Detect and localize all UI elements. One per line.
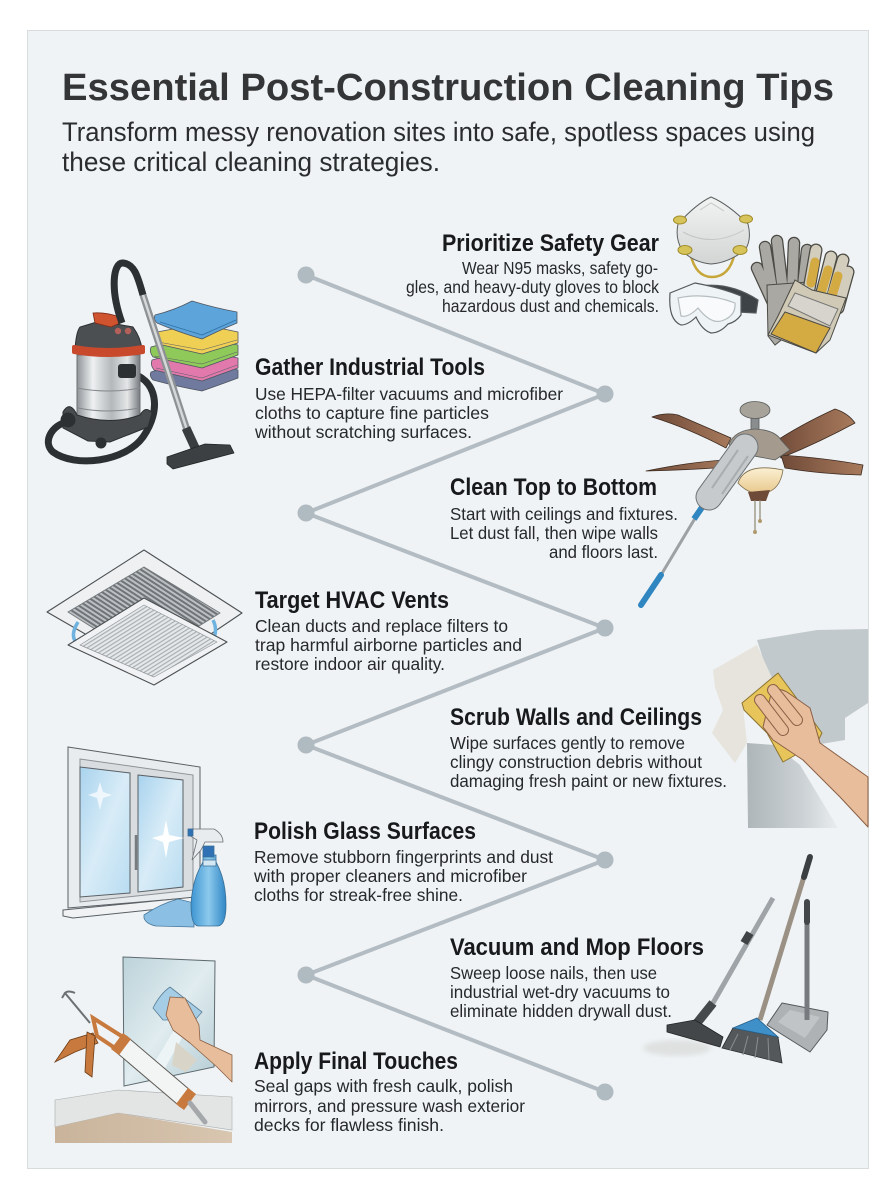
icon: fan blades xyxy=(646,409,863,475)
front glove xyxy=(808,250,848,308)
text block: Clean Top to Bottom xyxy=(450,474,678,562)
text block: Vacuum and Mop Floors: Sweep loose nails, then use xyxy=(450,963,657,983)
text block: Vacuum and Mop Floors: industrial wet-dry vacuums to xyxy=(450,982,670,1002)
text block: Gather Industrial Tools: without scratching surfaces. xyxy=(254,422,472,442)
text block: Target HVAC Vents xyxy=(255,587,522,674)
icon: baseboard and wood floor xyxy=(55,1090,232,1143)
icon: ceiling fan and duster xyxy=(641,402,863,605)
icon: duster with telescopic handle xyxy=(641,447,748,605)
text block: Gather Industrial Tools xyxy=(254,354,563,442)
icon: vacuum wand with floor head xyxy=(667,898,773,1047)
text block: Gather Industrial Tools: Use HEPA-filter vacuums and microfiber xyxy=(255,384,563,404)
icon: HVAC vent and filter xyxy=(47,550,242,685)
icon: sparkles on glass xyxy=(88,782,184,858)
icon: fan light bowl xyxy=(738,468,783,534)
icon: safety goggles xyxy=(670,283,758,333)
text block: Scrub Walls and Ceilings xyxy=(450,704,727,791)
text block: Gather Industrial Tools: cloths to capture fine particles xyxy=(255,403,489,423)
text block: Vacuum and Mop Floors: Vacuum and Mop Floors xyxy=(450,934,704,961)
icon: dustpan xyxy=(767,902,828,1052)
zigzag connector timeline xyxy=(298,266,614,1100)
icon: cloth and wiping hand xyxy=(153,987,232,1082)
text block: Target HVAC Vents: trap harmful airborne particles and xyxy=(255,635,522,655)
icon: caulk gun xyxy=(55,992,205,1122)
text block: Target HVAC Vents: Target HVAC Vents xyxy=(255,587,449,614)
icon: airflow arrows xyxy=(73,620,216,642)
text block: Scrub Walls and Ceilings: damaging fresh paint or new fixtures. xyxy=(450,771,727,791)
text block: Polish Glass Surfaces: Polish Glass Surfaces xyxy=(254,818,476,845)
text block: Clean Top to Bottom: Start with ceilings and fixtures. xyxy=(450,504,678,524)
text block: Scrub Walls and Ceilings: Wipe surfaces gently to remove xyxy=(450,733,685,753)
icon: vacuum wand and floor head xyxy=(114,263,143,323)
icon: shop vacuum and microfiber cloth stack xyxy=(48,263,238,469)
text block: Target HVAC Vents: Clean ducts and replace filters to xyxy=(255,616,508,636)
icon: grey painted wall xyxy=(747,629,868,828)
icon: pleated filter xyxy=(68,598,227,685)
subtitle: these critical cleaning strategies. xyxy=(62,147,440,177)
text block: Polish Glass Surfaces: Remove stubborn fingerprints and dust xyxy=(254,847,553,867)
icon: floor dust xyxy=(643,1040,711,1056)
text block: Clean Top to Bottom: Let dust fall, then wipe walls xyxy=(450,523,658,543)
subtitle: Transform messy renovation sites into safe, spotless spaces using xyxy=(62,117,815,147)
text block: Prioritize Safety Gear: Prioritize Safety Gear xyxy=(442,230,659,257)
icon: vacuum hose xyxy=(48,372,155,461)
icon: push broom xyxy=(722,857,810,1063)
icon: vacuum canister xyxy=(77,355,140,425)
text block: Apply Final Touches: Apply Final Touches xyxy=(254,1048,458,1075)
back glove xyxy=(757,241,807,305)
text block: Prioritize Safety Gear: gles, and heavy-duty gloves to block xyxy=(406,277,659,297)
icon: cleaned cream patch xyxy=(712,645,773,763)
text block: Polish Glass Surfaces: with proper cleaners and microfiber xyxy=(253,866,527,886)
icon: fan motor and canopy xyxy=(729,402,790,460)
text block: Vacuum and Mop Floors: eliminate hidden drywall dust. xyxy=(450,1001,672,1021)
text block: Apply Final Touches: decks for flawless finish. xyxy=(254,1115,444,1135)
text block: Apply Final Touches: mirrors, and pressure wash exterior xyxy=(254,1096,525,1116)
icon: caulk gun and mirror polishing xyxy=(55,957,232,1143)
text block: Prioritize Safety Gear xyxy=(406,230,659,316)
icon: yellow sponge xyxy=(742,673,822,762)
icon: work gloves xyxy=(757,241,848,353)
icon: window frame and panes xyxy=(63,747,200,918)
text block: Target HVAC Vents: restore indoor air quality. xyxy=(255,654,445,674)
text block: Scrub Walls and Ceilings: Scrub Walls and Ceilings xyxy=(450,704,702,731)
icon: hand scrubbing wall with sponge xyxy=(712,629,868,828)
icon: spray bottle xyxy=(188,829,226,926)
subtitle xyxy=(62,117,815,177)
icon: N95 mask, goggles and gloves xyxy=(670,197,848,353)
icon: vacuum wand, broom and dustpan xyxy=(643,857,828,1063)
icon: ceiling vent frame xyxy=(47,550,242,673)
icon: N95 mask xyxy=(674,197,752,277)
icon: hand and forearm xyxy=(760,689,868,827)
text block: Apply Final Touches xyxy=(254,1048,525,1135)
text block: Clean Top to Bottom: Clean Top to Bottom xyxy=(450,474,657,501)
text block: Apply Final Touches: Seal gaps with fresh caulk, polish xyxy=(254,1076,513,1096)
text block: Clean Top to Bottom: and floors last. xyxy=(549,542,658,562)
icon: folded blue cloth xyxy=(144,899,194,927)
icon: wall mirror xyxy=(123,957,215,1086)
text block: Scrub Walls and Ceilings: clingy construction debris without xyxy=(450,752,702,772)
text block: Gather Industrial Tools: Gather Industrial Tools xyxy=(255,354,485,381)
text block: Prioritize Safety Gear: Wear N95 masks, safety go- xyxy=(462,258,658,278)
text block: Prioritize Safety Gear: hazardous dust and chemicals. xyxy=(442,296,659,316)
text block: Polish Glass Surfaces xyxy=(253,818,553,905)
title: Essential Post-Construction Cleaning Tips xyxy=(62,67,834,109)
text block: Vacuum and Mop Floors xyxy=(450,934,704,1021)
icon: stacked microfiber cloths xyxy=(150,301,238,391)
icon: window and glass cleaner xyxy=(63,747,226,927)
text block: Polish Glass Surfaces: cloths for streak-free shine. xyxy=(254,885,463,905)
